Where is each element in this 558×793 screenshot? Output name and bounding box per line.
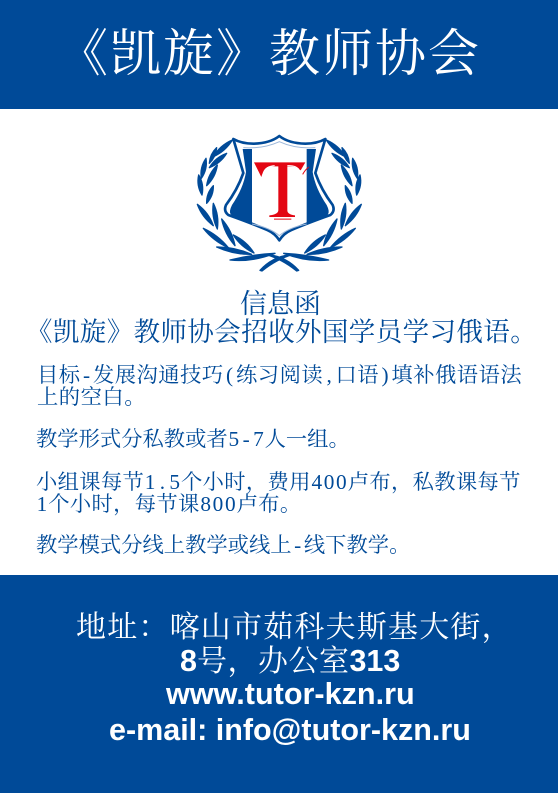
paragraph: fees [36,470,521,516]
paragraph: fees: 0 [336,470,347,494]
email: e-mail: info@tutor-kzn.ru [109,713,471,747]
paragraph: fees: 1 [145,470,156,494]
paragraph: fees: . [160,470,165,494]
paragraph: fees: 小组课每节 个小时，费用 卢布，私教课每节 [36,470,521,494]
paragraph: goal: , [326,363,332,387]
paragraph: fees: 0 [324,470,335,494]
paragraph: fees: 0 [225,492,236,516]
right laurel branch [265,140,361,271]
paragraph: fees: 个小时，每节课 卢布。 [48,492,301,516]
paragraph: mode: 教学模式分线上教学或线上 线下教学。 [36,533,410,557]
footer band [0,575,558,793]
paragraph: goal: ) [381,363,389,387]
letter T emblem [254,162,309,220]
paragraph: goal: 目标 发展沟通技巧 练习阅读 口语 填补俄语语法 [37,363,522,387]
left laurel branch [197,140,293,271]
paragraph: goal: 上的空白。 [37,385,146,409]
paragraph: goal: - [83,363,91,387]
title: 《凯旋》教师协会 [57,27,481,83]
shield outline [225,136,334,240]
paragraph: fees: 8 [200,492,211,516]
shield inner blue panels [230,149,252,224]
paragraph: mode: - [294,533,301,557]
paragraph: format: 5 [228,427,239,451]
shield inner line [243,142,315,236]
paragraph: goal [37,363,522,409]
address line 1: 地址：喀山市茹科夫斯基大街， [76,602,513,646]
paragraph: format: 7 [253,427,264,451]
paragraph: goal: ( [226,363,234,387]
header band [0,0,558,109]
address line 2: 8号，办公室313 [180,636,400,680]
paragraph: fees: 1 [37,492,48,516]
website: www.tutor-kzn.ru [166,677,415,711]
paragraph: format: - [243,427,250,451]
intro line: 《凯旋》教师协会招收外国学员学习俄语。 [26,317,537,347]
paragraph: format: 教学形式分私教或者 人一组。 [36,427,350,451]
paragraph: fees: 4 [311,470,322,494]
paragraph: fees: 5 [169,470,180,494]
info heading: 信息函 [240,289,321,319]
logo: laurel wreath and shield [196,134,362,272]
paragraph: fees: 0 [213,492,224,516]
